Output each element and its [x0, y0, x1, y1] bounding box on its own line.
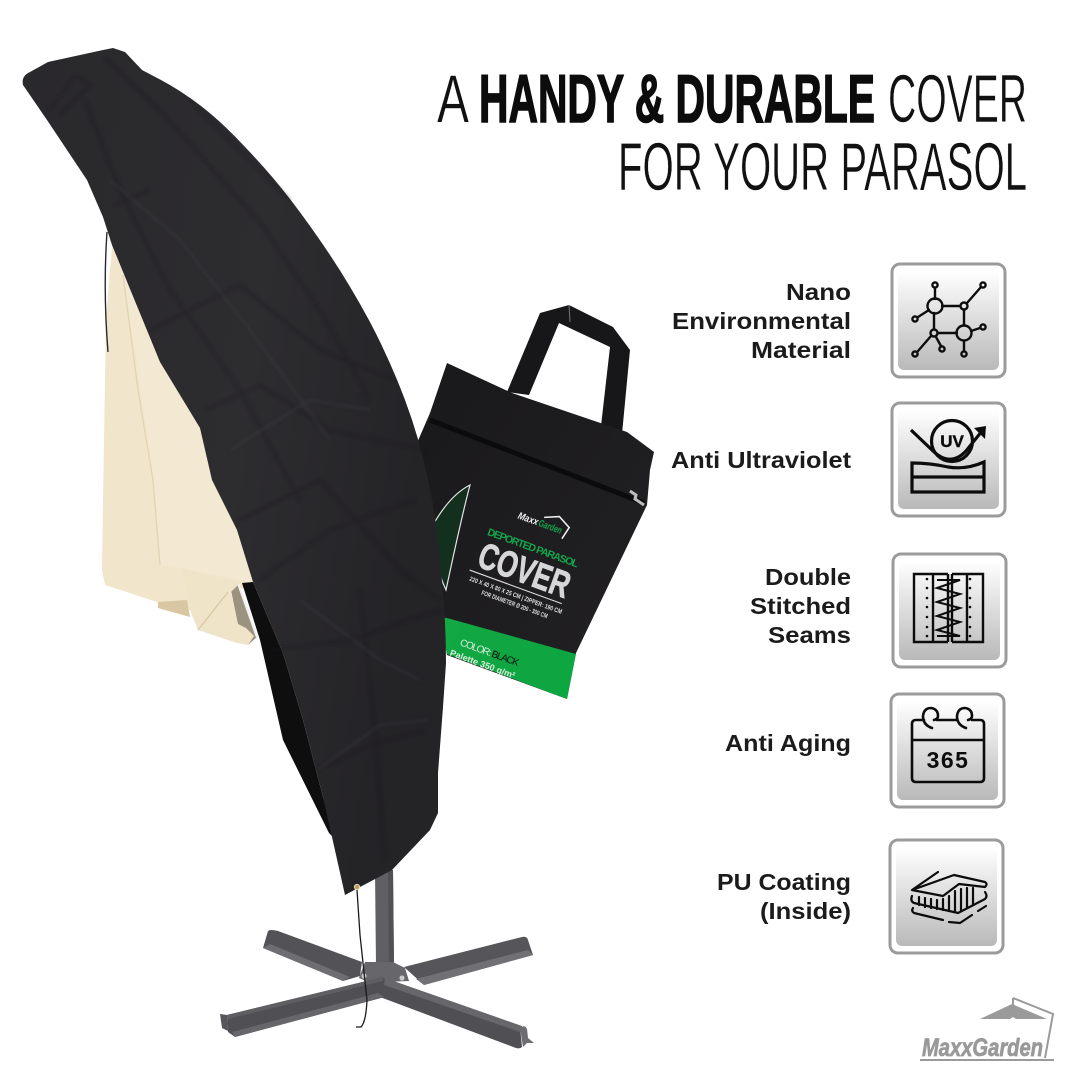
- brand logo: [920, 998, 1054, 1062]
- icon: calendar: [891, 694, 1004, 807]
- cover highlights: [110, 180, 428, 770]
- black parasol cover: [23, 48, 446, 895]
- label: [750, 564, 851, 648]
- label: Stitched: [750, 593, 851, 619]
- printed label: FOR DIAMETER Ø 200 - 300 CM: [480, 590, 548, 620]
- label: [672, 279, 851, 363]
- feature: anti aging: [725, 694, 1004, 807]
- feature: pu coating: [717, 840, 1003, 953]
- label: PU Coating: [717, 869, 851, 895]
- tan underside: [158, 600, 190, 617]
- printed label: Garden: [537, 518, 563, 537]
- label: Seams: [768, 622, 851, 648]
- mini parasol graphic: [433, 485, 470, 590]
- label: [717, 869, 851, 924]
- zipper: [430, 420, 644, 503]
- bag logo: Maxx: [516, 511, 540, 528]
- icon: uv: UV: [940, 432, 964, 451]
- icon: calendar: 365: [927, 747, 969, 773]
- dimensions: 220 X 40 X 80 X 25 CM | ZIPPER: 190 CM: [468, 576, 563, 616]
- cover word: COVER: [473, 535, 576, 606]
- storage bag: [417, 305, 654, 699]
- printed label: Palette 350 g/m²: [449, 648, 516, 681]
- tie cord: [356, 890, 367, 1027]
- back-left arm: [263, 930, 362, 981]
- icon: molecules: [892, 264, 1005, 377]
- title line 1: A: [437, 61, 469, 137]
- icon: coated layers: [890, 840, 1003, 953]
- parasol canopy: [102, 232, 257, 645]
- grommet: [354, 884, 360, 890]
- label: Nano: [786, 279, 851, 305]
- frame: [231, 583, 257, 645]
- label: Anti Ultraviolet: [671, 447, 851, 473]
- colour text: COLOR: BLACK: [458, 638, 521, 669]
- feature: nano environmental material: [672, 264, 1005, 377]
- parasol stand base: [220, 870, 534, 1048]
- mounting plate: [359, 962, 409, 982]
- cover body: [23, 48, 446, 895]
- cover lining: [242, 582, 334, 838]
- printed label: [439, 494, 592, 688]
- front-right arm: [380, 978, 522, 1048]
- wordmark: MaxxGarden: [922, 1034, 1043, 1062]
- drawstring: [105, 232, 108, 352]
- title: [437, 61, 1027, 205]
- label: Environmental: [672, 308, 851, 334]
- cover folds: [50, 58, 440, 860]
- front-left arm: [227, 977, 385, 1037]
- green stripe: [440, 617, 576, 699]
- label: Anti Aging: [725, 730, 851, 756]
- label: Double: [765, 564, 851, 590]
- label: Material: [751, 337, 851, 363]
- back-right arm: [404, 937, 533, 985]
- lower fold: [182, 568, 254, 645]
- icon: uv: [892, 403, 1005, 516]
- feature: double stitched seams: [750, 554, 1006, 667]
- underline: [920, 1059, 1054, 1061]
- deported parasol heading: DEPORTED PARASOL: [486, 526, 581, 571]
- front fold: [122, 270, 253, 582]
- feature: anti ultraviolet: [671, 403, 1005, 516]
- label: (Inside): [760, 898, 851, 924]
- bag handle: [507, 305, 630, 434]
- pole: [375, 870, 394, 966]
- roof mark: [980, 1004, 1047, 1019]
- bag body: [417, 363, 654, 699]
- icon: stitched seams: [893, 554, 1006, 667]
- back cloth layer: [102, 245, 253, 610]
